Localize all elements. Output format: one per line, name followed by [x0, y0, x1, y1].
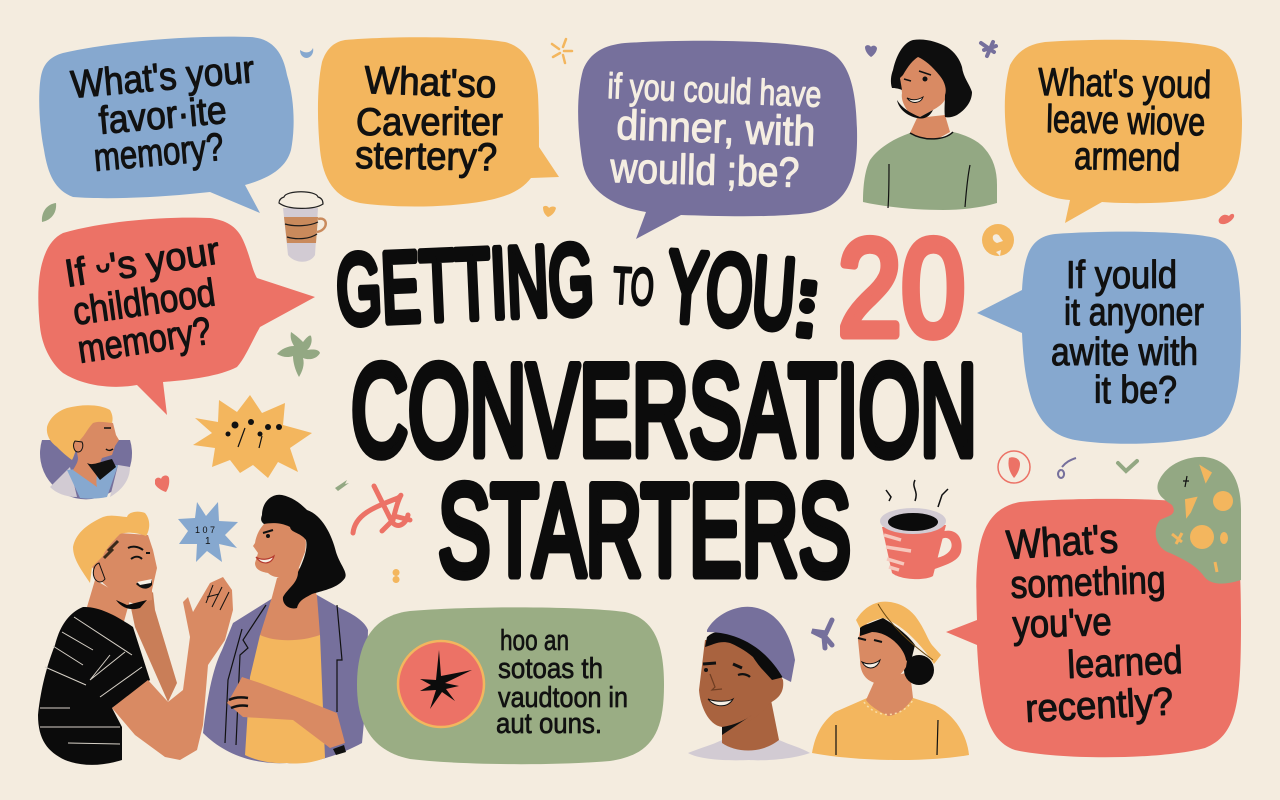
person: woman in green sweater	[863, 39, 997, 210]
speech bubble: anyone right: awite with	[1051, 331, 1198, 374]
icon: orange sparkle	[552, 39, 572, 63]
icons: small right-side marks	[998, 451, 1137, 483]
speech bubble: top right: leave wiove	[1046, 98, 1206, 144]
people: man and woman talking	[38, 495, 368, 765]
title: colon: :	[788, 244, 827, 359]
speech bubble: learned recently: something	[1010, 559, 1166, 607]
icon: blue star note	[178, 502, 238, 562]
icon: red mark	[1219, 214, 1234, 224]
icon: small purple heart	[865, 45, 877, 57]
speech bubble: childhood memory	[38, 218, 315, 415]
speech bubble: childhood memory: If ᵕ's your	[62, 230, 223, 296]
person: woman with yellow hat	[812, 602, 969, 760]
speech bubble: green with compass	[357, 607, 664, 764]
speech bubble: anyone right: it anyoner	[1064, 291, 1204, 334]
title: TO: TO	[611, 257, 655, 317]
icon: purple sprig	[981, 42, 996, 56]
title: GETTING: GETTING	[334, 223, 596, 345]
speech bubble: learned recently: What's	[1005, 515, 1119, 568]
title: 20: 20	[838, 212, 965, 365]
icon: orange dots	[393, 569, 400, 583]
green blob with orange spots	[1156, 457, 1241, 584]
speech bubble: favorite memory: favor·ite	[97, 89, 228, 143]
icon: orange heart	[543, 206, 556, 217]
icon: small blue heart	[300, 48, 313, 58]
title: STARTERS: STARTERS	[438, 457, 851, 603]
speech bubble: anyone right	[977, 232, 1241, 444]
speech bubble: green with compass: hoo an	[500, 625, 569, 657]
speech bubble: anyone right: If yould	[1066, 254, 1177, 297]
speech bubble: top right: armend	[1074, 135, 1181, 180]
speech bubble: learned recently: recently?	[1024, 680, 1174, 731]
speech bubble: green with compass: aut ouns.	[496, 708, 602, 740]
icon: coffee mug with steam	[880, 480, 962, 579]
person: blond profile in circle	[40, 405, 132, 499]
speech bubble: dinner with: dinner, with	[616, 101, 816, 155]
speech bubble: dinner with	[578, 41, 857, 239]
speech bubble: green with compass: vaudtoon in	[498, 682, 628, 714]
speech bubble: childhood memory: childhood	[70, 271, 218, 334]
person: man in striped shirt	[38, 512, 233, 765]
speech bubble: favorite memory	[39, 37, 294, 213]
icon: yellow ring	[982, 224, 1014, 256]
speech bubble: what's so: stertery?	[355, 134, 498, 179]
icon: blue star note: 1 0 7	[195, 525, 215, 535]
speech bubble: learned recently: learned	[1067, 639, 1183, 687]
icon: green leaf	[42, 203, 56, 222]
person: boy with purple cap	[688, 607, 810, 760]
speech bubble: dinner with: if you could have	[607, 65, 822, 115]
icon: green leaf sprig	[277, 332, 320, 377]
person: woman with cardigan	[203, 495, 368, 763]
icon: tiny green sprig	[335, 480, 349, 491]
title: YOU: YOU	[663, 230, 799, 351]
icon: takeaway coffee cup	[279, 192, 326, 262]
speech bubble: dinner with: woulld ;be?	[609, 144, 800, 196]
speech bubble: top right: What's youd	[1038, 61, 1212, 107]
speech bubble: learned recently	[946, 499, 1241, 757]
speech bubble: favorite memory: memory?	[92, 126, 225, 180]
icon: blue star note: 1	[205, 536, 211, 547]
speech bubble: what's so: What'so	[364, 59, 497, 107]
icon: red squiggle	[353, 486, 410, 533]
icon: yellow starburst with marks	[193, 395, 312, 478]
speech bubble: learned recently: you've	[1012, 601, 1112, 647]
speech bubble: childhood memory: memory?	[75, 310, 214, 372]
icon: compass circle	[398, 641, 484, 727]
title	[334, 212, 977, 603]
speech bubble: what's so	[318, 37, 559, 207]
speech bubble: anyone right: it be?	[1094, 369, 1177, 412]
speech bubble: what's so: Caveriter	[356, 101, 503, 144]
speech bubble: favorite memory: What's your	[69, 48, 256, 107]
speech bubble: green with compass: sotoas th	[498, 653, 603, 685]
speech bubble: top right	[1005, 40, 1242, 223]
icon: red heart	[155, 475, 169, 492]
icon: purple sprig lower	[812, 620, 832, 648]
